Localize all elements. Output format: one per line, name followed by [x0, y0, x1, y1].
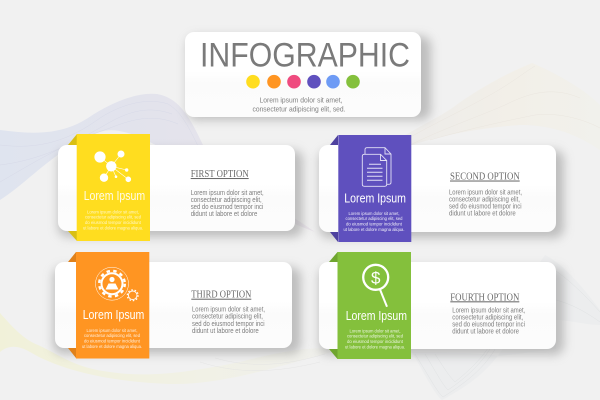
ribbon text: ut labore et dolore magna aliqua. — [345, 344, 405, 350]
title: INFOGRAPHIC — [200, 36, 410, 74]
option text — [449, 190, 522, 218]
option text: sed do eiusmod tempor inci — [191, 204, 264, 211]
ribbon text: do eiusmod tempor incididunt — [84, 338, 141, 343]
option text — [452, 308, 525, 336]
icon: magnifier with dollar: $ — [371, 268, 381, 288]
icon: documents — [362, 148, 391, 186]
wave: lower left — [0, 313, 340, 384]
option text: didunt ut labore et dolore — [449, 210, 516, 218]
header text — [252, 96, 346, 114]
option text: consectetur adipiscing elit, — [192, 314, 263, 320]
wave: upper right — [382, 63, 600, 150]
option heading: FIRST OPTION — [191, 169, 249, 180]
header text: Lorem ipsum dolor sit amet, — [260, 96, 342, 104]
ribbon heading: Lorem Ipsum — [344, 191, 406, 205]
option heading: FOURTH OPTION — [450, 292, 520, 303]
option text: Lorem ipsum dolor sit amet, — [191, 190, 264, 197]
panel: second option — [319, 135, 564, 242]
option text: sed do eiusmod tempor inci — [449, 204, 522, 210]
option text: didunt ut labore et dolore — [191, 211, 258, 218]
option text — [192, 306, 265, 335]
ribbon text: consectetur adipiscing elit, sed — [84, 333, 140, 338]
ribbon text: Lorem ipsum dolor sit amet, — [86, 328, 138, 333]
ribbon text: consectetur adipiscing elit, sed — [346, 216, 403, 221]
ribbon text: consectetur adipiscing elit, sed — [347, 334, 403, 339]
ribbon heading: Lorem Ipsum — [84, 189, 145, 203]
option heading: SECOND OPTION — [450, 172, 520, 182]
wave: upper left — [0, 94, 315, 232]
ribbon text: Lorem ipsum dolor sit amet, — [348, 211, 400, 216]
ribbon text: ut labore et dolore magna aliqua. — [344, 227, 404, 232]
ribbon text — [83, 209, 143, 230]
colour dots — [246, 75, 360, 88]
option text: didunt ut labore et dolore — [192, 328, 259, 335]
ribbon text — [345, 328, 405, 350]
icon: magnifier with dollar — [363, 265, 388, 307]
ribbon heading: Lorem Ipsum — [346, 309, 407, 323]
icon: molecule — [95, 151, 131, 182]
option text: consectetur adipiscing elit, — [452, 314, 523, 322]
ribbon text: do eiusmod tempor incididunt — [347, 339, 404, 344]
ribbon text: do eiusmod tempor incididunt — [346, 222, 403, 226]
option heading: THIRD OPTION — [191, 290, 252, 301]
option text: consectetur adipiscing elit, — [449, 196, 520, 204]
ribbon text: ut labore et dolore magna aliqua. — [83, 225, 143, 230]
header card — [185, 32, 431, 120]
option text: consectetur adipiscing elit, — [191, 197, 262, 204]
ribbon text — [82, 328, 142, 349]
option text: sed do eiusmod tempor inci — [452, 322, 525, 328]
ribbon heading: Lorem Ipsum — [83, 308, 144, 322]
icon: gears and person — [96, 267, 138, 301]
panel: fourth option — [319, 252, 564, 359]
option text: didunt ut labore et dolore — [452, 328, 519, 336]
wave: lower right — [412, 255, 600, 400]
header text: consectetur adipiscing elit, sed. — [252, 104, 346, 114]
ribbon text: Lorem ipsum dolor sit amet, — [350, 328, 400, 334]
panel: first option — [58, 134, 303, 241]
option text: Lorem ipsum dolor sit amet, — [452, 308, 525, 314]
option text: Lorem ipsum dolor sit amet, — [449, 190, 522, 196]
option text: sed do eiusmod tempor inci — [192, 321, 265, 328]
ribbon text: ut labore et dolore magna aliqua. — [82, 344, 142, 349]
ribbon text — [344, 211, 404, 232]
ribbon text: do eiusmod tempor incididunt — [85, 220, 142, 225]
ribbon text: Lorem ipsum dolor sit amet, — [87, 209, 139, 214]
ribbon text: consectetur adipiscing elit, sed — [85, 215, 141, 220]
panel: third option — [53, 252, 301, 358]
option text — [191, 190, 264, 218]
option text: Lorem ipsum dolor sit amet, — [192, 306, 265, 314]
